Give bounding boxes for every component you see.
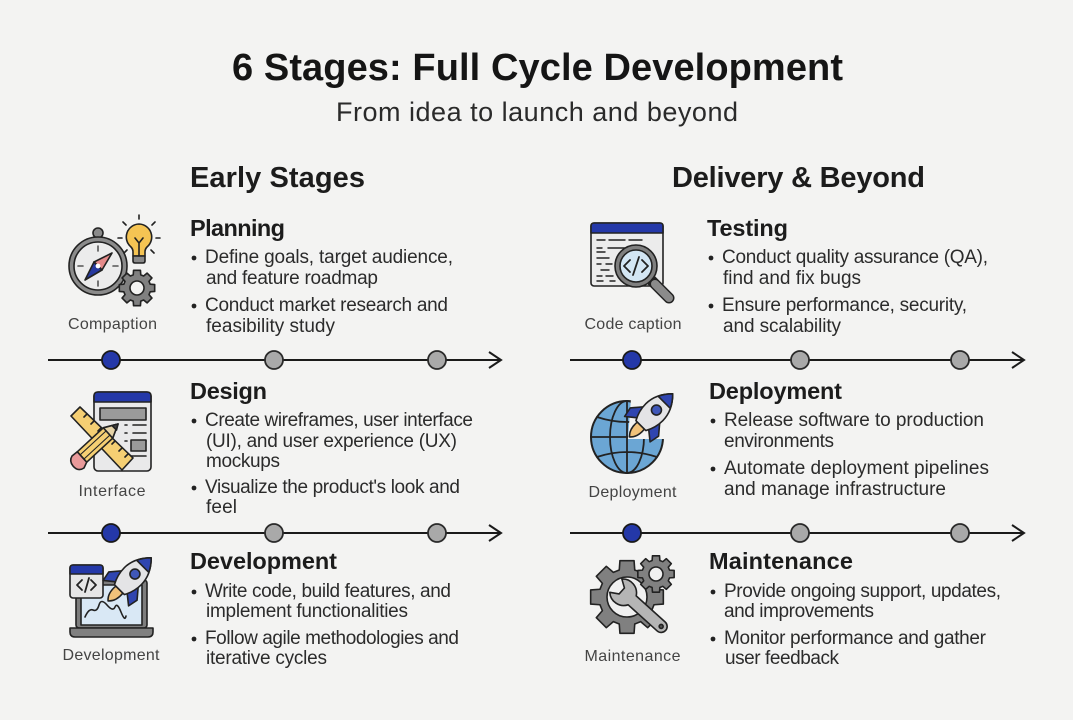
bullets: Planning: Conduct market research and bbox=[205, 295, 448, 316]
icon caption: Interface: Interface bbox=[78, 483, 146, 500]
bullets: Planning: Define goals, target audience, bbox=[205, 247, 453, 268]
bullets: Development: Follow agile methodologies and bbox=[205, 628, 459, 649]
bullets: Design: Create wireframes, user interface bbox=[205, 410, 473, 431]
section: Development bbox=[190, 548, 459, 669]
section: Testing bbox=[707, 215, 988, 337]
bullets: Development bbox=[192, 581, 459, 669]
title: 6 Stages: Full Cycle Development bbox=[232, 47, 843, 89]
subtitle: From idea to launch and beyond bbox=[336, 97, 738, 127]
column heading: Early Stages: Early Stages bbox=[190, 162, 365, 194]
bullets: Maintenance bbox=[711, 581, 1001, 669]
icon caption: Code caption: Code caption bbox=[584, 316, 682, 333]
bullets: Design: mockups bbox=[206, 451, 280, 472]
bullets: Deployment: Automate deployment pipelines bbox=[724, 458, 989, 479]
icon caption: Development: Development bbox=[62, 647, 160, 664]
section: Maintenance bbox=[709, 548, 1001, 669]
timeline: left upper bbox=[48, 351, 501, 369]
bullets: Testing bbox=[709, 247, 988, 337]
bullets: Planning bbox=[192, 247, 453, 337]
heading: Design: Design bbox=[190, 378, 267, 404]
heading: Testing: Testing bbox=[707, 215, 788, 241]
heading: Maintenance: Maintenance bbox=[709, 548, 853, 574]
bullets: Planning: and feature roadmap bbox=[206, 268, 378, 289]
bullets: Development: implement functionalities bbox=[206, 601, 408, 622]
icon: wireframe window, ruler and pencil bbox=[71, 392, 151, 471]
bullets: Maintenance: user feedback bbox=[725, 648, 840, 669]
heading: Deployment: Deployment bbox=[709, 378, 842, 404]
bullets: Maintenance: Provide ongoing support, updates, bbox=[724, 581, 1001, 602]
bullets: Development: iterative cycles bbox=[206, 648, 327, 669]
bullets: Maintenance: Monitor performance and gather bbox=[724, 628, 987, 649]
section: Planning bbox=[190, 215, 453, 337]
bullets: Deployment: environments bbox=[724, 431, 834, 452]
bullets: Deployment bbox=[711, 410, 989, 500]
icon: laptop, code window and rocket bbox=[70, 544, 165, 637]
icon: code window and magnifier bbox=[591, 223, 669, 298]
section: Deployment bbox=[709, 378, 989, 500]
icon: compass, bulb and gear bbox=[69, 215, 160, 306]
icon: gears and wrench bbox=[591, 556, 674, 640]
bullets: Design bbox=[192, 410, 473, 518]
bullets: Testing: Ensure performance, security, bbox=[722, 295, 967, 316]
timeline: right lower bbox=[570, 524, 1024, 542]
icon: globe and rocket bbox=[591, 380, 687, 473]
bullets: Deployment: and manage infrastructure bbox=[724, 479, 946, 500]
bullets: Development: Write code, build features, and bbox=[205, 581, 451, 602]
bullets: Design: (UI), and user experience (UX) bbox=[206, 431, 457, 452]
bullets: Deployment: Release software to production bbox=[724, 410, 984, 431]
column heading: Delivery & Beyond: Delivery & Beyond bbox=[672, 162, 925, 194]
section: Design bbox=[190, 378, 473, 518]
bullets: Testing: Conduct quality assurance (QA), bbox=[722, 247, 988, 268]
timeline: right upper bbox=[570, 351, 1024, 369]
bullets: Testing: find and fix bugs bbox=[723, 268, 861, 289]
icon caption: Maintenance: Maintenance bbox=[584, 648, 681, 665]
bullets: Testing: and scalability bbox=[723, 316, 842, 337]
icon caption: Deployment: Deployment bbox=[588, 484, 677, 501]
icon caption: Compaption: Compaption bbox=[68, 316, 157, 333]
heading: Development: Development bbox=[190, 548, 337, 574]
bullets: Maintenance: and improvements bbox=[724, 601, 874, 622]
bullets: Planning: feasibility study bbox=[206, 316, 336, 337]
bullets: Design: feel bbox=[206, 497, 237, 518]
bullets: Design: Visualize the product's look and bbox=[205, 477, 460, 498]
timeline: left lower bbox=[48, 524, 501, 542]
heading: Planning: Planning bbox=[190, 215, 285, 241]
